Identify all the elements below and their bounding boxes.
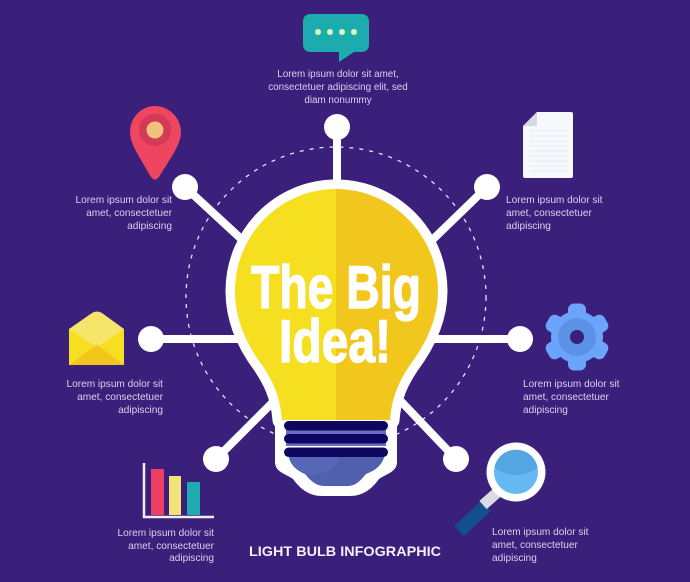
- text: right caption: amet, consectetuer: [523, 392, 609, 403]
- text: lower left caption: [118, 528, 215, 564]
- text: upper right caption: [506, 195, 603, 232]
- icon: document: [523, 112, 573, 178]
- text: left caption: amet, consectetuer: [77, 392, 164, 403]
- text: top caption: [268, 69, 408, 106]
- text: upper right caption: Lorem ipsum dolor sit: [506, 195, 603, 206]
- text: top caption: consectetuer adipiscing elit, sed: [268, 82, 408, 93]
- footer title: LIGHT BULB INFOGRAPHIC: [249, 543, 441, 559]
- icon: gear: [543, 304, 611, 370]
- text: lower right caption: amet, consectetuer: [492, 540, 578, 551]
- text: lower right caption: adipiscing: [492, 553, 537, 564]
- light bulb: [235, 189, 438, 496]
- text: top caption: diam nonummy: [304, 95, 372, 106]
- text: upper left caption: amet, consectetuer: [86, 208, 173, 219]
- text: lower right caption: Lorem ipsum dolor sit: [492, 527, 589, 538]
- icon: magnifying glass: [459, 442, 546, 531]
- icon: envelope: [69, 312, 124, 365]
- text: right caption: adipiscing: [523, 405, 568, 416]
- text: lower left caption: amet, consectetuer: [128, 541, 215, 552]
- text: upper right caption: adipiscing: [506, 221, 551, 232]
- text: right caption: Lorem ipsum dolor sit: [523, 379, 620, 390]
- text: right caption: [523, 379, 620, 416]
- text: upper left caption: Lorem ipsum dolor sit: [76, 195, 172, 206]
- text: lower left caption: adipiscing: [169, 553, 214, 564]
- text: upper left caption: [76, 195, 173, 232]
- text: top caption: Lorem ipsum dolor sit amet,: [277, 69, 399, 80]
- bulb title: [251, 254, 421, 375]
- icon: bar chart: [144, 463, 214, 517]
- text: upper right caption: amet, consectetuer: [506, 208, 592, 219]
- text: left caption: [66, 379, 164, 416]
- text: lower left caption: Lorem ipsum dolor sit: [118, 528, 214, 539]
- text: lower right caption: [492, 527, 589, 564]
- bulb title: Idea!: [279, 308, 391, 375]
- connector lines and nodes: [138, 114, 533, 472]
- text: left caption: adipiscing: [118, 405, 163, 416]
- icon: speech bubble: [303, 14, 369, 62]
- text: upper left caption: adipiscing: [127, 221, 172, 232]
- icon: map pin: [130, 106, 181, 180]
- bulb title: The Big: [251, 254, 421, 321]
- text: left caption: Lorem ipsum dolor sit: [66, 379, 163, 390]
